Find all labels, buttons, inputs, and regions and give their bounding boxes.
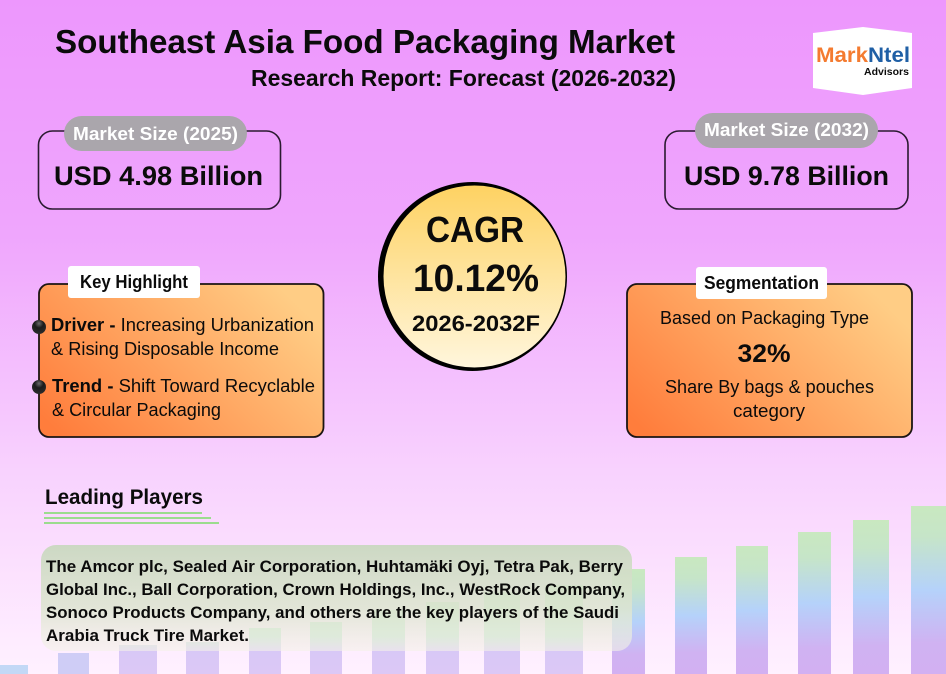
bar chart decoration bbox=[0, 506, 946, 674]
badge: market size 2032 bbox=[695, 113, 878, 148]
title: Southeast Asia Food Packaging Market bbox=[55, 23, 675, 60]
logo: MarkNtel Advisors: Ntel bbox=[868, 43, 910, 67]
panel: leading players text bbox=[41, 545, 632, 651]
panel: leading players text: Sonoco Products Company, and others are the key players of the Saudi bbox=[46, 603, 619, 622]
panel: market size 2025 bbox=[38, 116, 280, 209]
panel: leading players text: The Amcor plc, Sealed Air Corporation, Huhtamäki Oyj, Tetra Pak, Berry bbox=[46, 557, 624, 576]
bullet: trend: Trend - Shift Toward Recyclable bbox=[52, 375, 315, 396]
value: USD 9.78 Billion: USD 9.78 Billion bbox=[684, 161, 889, 191]
badge: market size 2025 bbox=[64, 116, 247, 151]
logo: MarkNtel Advisors: Advisors bbox=[864, 66, 909, 78]
badge: market size 2025: Market Size (2025) bbox=[73, 124, 238, 144]
bullet: trend: & Circular Packaging bbox=[52, 399, 221, 420]
bullet: driver: Driver - Increasing Urbanization bbox=[51, 314, 314, 335]
text: share: Share By bags & pouches bbox=[665, 376, 874, 397]
heading: leading players: Leading Players bbox=[45, 485, 203, 509]
tab: key highlight bbox=[68, 266, 200, 298]
CAGR circle: 10.12% bbox=[413, 258, 539, 300]
panel: segmentation bbox=[627, 267, 912, 437]
logo: MarkNtel Advisors: Mark bbox=[816, 43, 868, 67]
badge: market size 2032: Market Size (2032) bbox=[704, 120, 869, 140]
panel: key highlight bbox=[32, 266, 324, 437]
panel: market size 2032 bbox=[665, 113, 908, 209]
value: USD 4.98 Billion: USD 4.98 Billion bbox=[54, 161, 263, 191]
value: 32%: 32% bbox=[738, 340, 790, 368]
panel: leading players text: Arabia Truck Tire Market. bbox=[46, 626, 249, 645]
bullet: driver: & Rising Disposable Income bbox=[51, 338, 279, 359]
text: share bbox=[665, 376, 874, 421]
tab: segmentation: Segmentation bbox=[704, 273, 819, 293]
CAGR circle bbox=[378, 182, 567, 371]
title bbox=[55, 23, 676, 91]
bullet: driver bbox=[32, 314, 314, 359]
title: Research Report: Forecast (2026-2032) bbox=[251, 65, 676, 91]
logo: MarkNtel Advisors bbox=[813, 27, 912, 95]
text: packaging type: Based on Packaging Type bbox=[660, 307, 869, 328]
tab: segmentation bbox=[696, 267, 827, 299]
CAGR circle: 2026-2032F bbox=[412, 311, 540, 336]
text: share: category bbox=[733, 400, 806, 421]
CAGR circle: CAGR bbox=[426, 209, 524, 250]
tab: key highlight: Key Highlight bbox=[80, 272, 188, 292]
bullet: trend bbox=[32, 375, 315, 420]
panel: leading players text: Global Inc., Ball Corporation, Crown Holdings, Inc., WestRock Company, bbox=[46, 580, 625, 599]
